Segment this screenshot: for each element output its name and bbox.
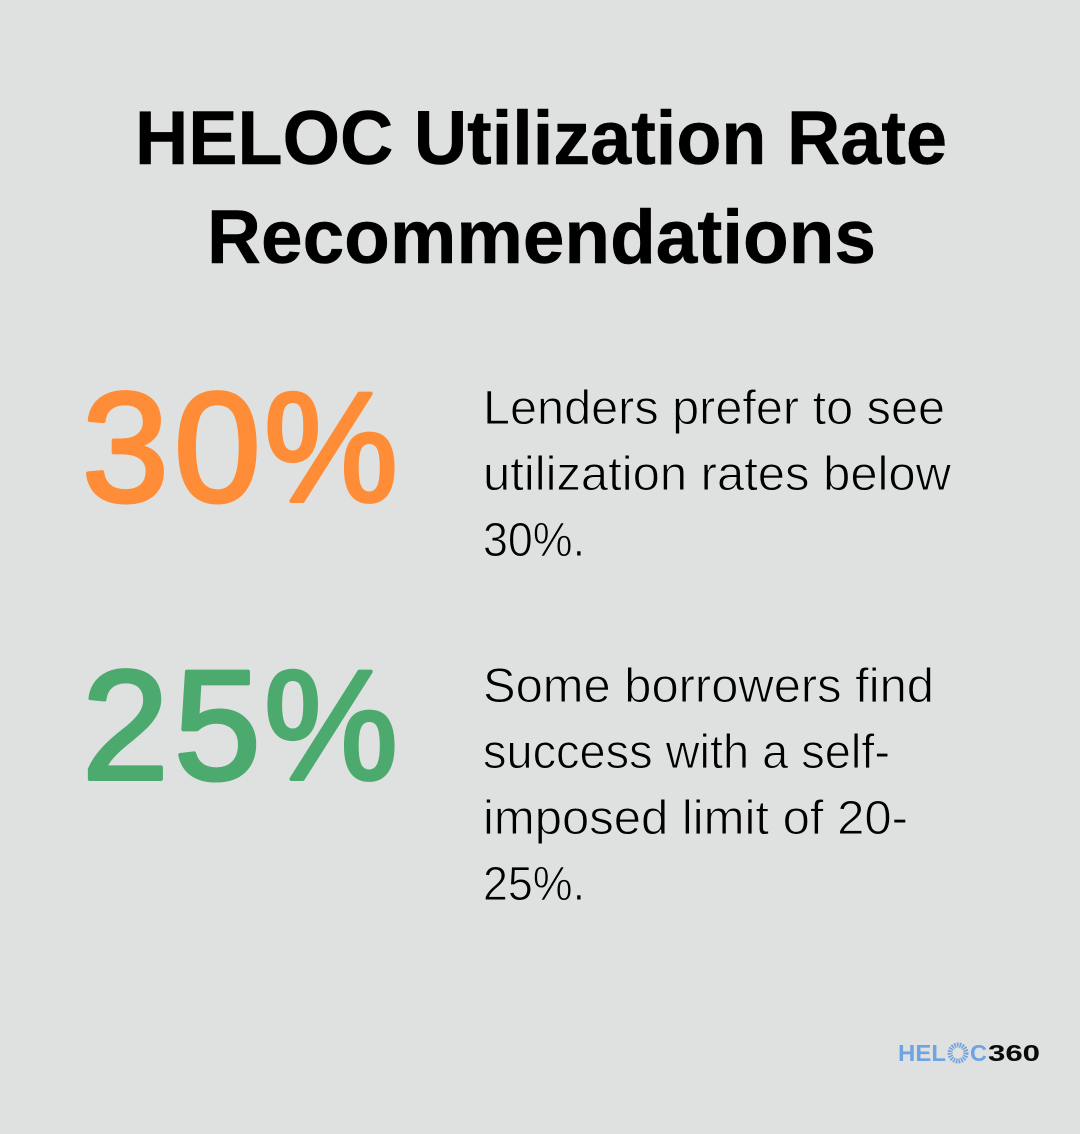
description: 25%: imposed limit of 20-	[483, 792, 908, 845]
description: 25%: Some borrowers find	[483, 660, 934, 713]
stat: 30%: 30	[82, 361, 261, 535]
description: 30%	[483, 382, 951, 567]
description: 25%	[483, 660, 934, 911]
description: 30%: 30%.	[483, 514, 585, 567]
logo: HELOC360: HEL	[898, 1040, 946, 1066]
logo: HELOC360: C	[970, 1040, 987, 1066]
description: 30%: Lenders prefer to see	[483, 382, 945, 435]
title	[135, 96, 947, 280]
title: Recommendations	[207, 195, 876, 280]
stat: 25%	[82, 639, 398, 813]
title: HELOC Utilization Rate	[135, 96, 947, 181]
description: 25%: success with a self-	[483, 726, 890, 779]
description: 25%: 25%.	[483, 858, 585, 911]
stat: 25%: 25	[82, 639, 261, 813]
description: 30%: utilization rates below	[483, 448, 951, 501]
stat: 30%: %	[264, 361, 398, 535]
logo: HELOC360: 360	[988, 1040, 1040, 1066]
stat: 30%	[82, 361, 398, 535]
stat: 25%: %	[264, 639, 398, 813]
logo: HELOC360	[898, 1040, 1040, 1066]
icon: logo swirl O	[950, 1045, 966, 1061]
